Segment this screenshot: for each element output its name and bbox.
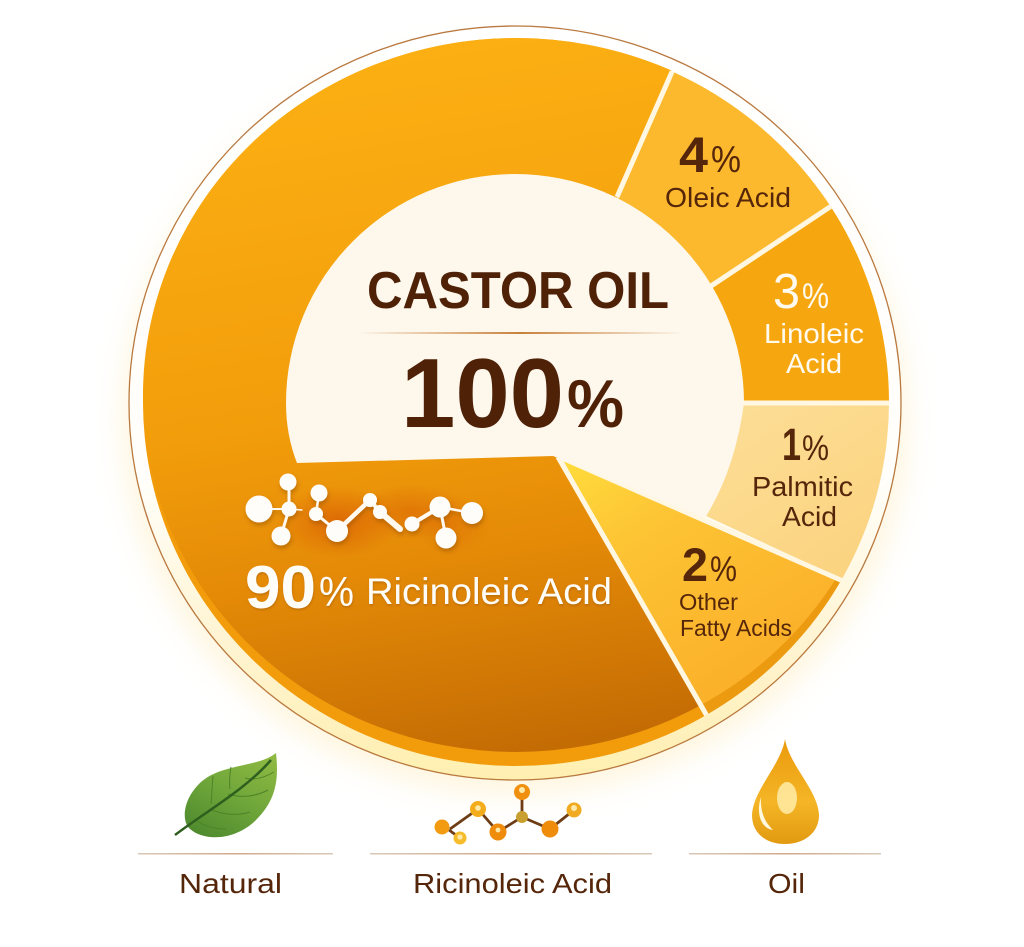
label: 2% other fatty acids — [679, 538, 792, 641]
label: 4% oleic acid: Oleic Acid — [665, 182, 791, 213]
icon: green leaf — [175, 753, 277, 837]
column rule: natural — [138, 853, 333, 854]
caption: oil: Oil — [768, 868, 805, 899]
background glow under the chart — [123, 46, 907, 794]
label: 2% other fatty acids: Other — [679, 589, 738, 615]
label: 90% ricinoleic acid: Ricinoleic Acid — [366, 571, 612, 612]
label: 90% ricinoleic acid: 90 — [245, 554, 316, 621]
label: 3% linoleic acid: Linoleic — [764, 318, 864, 349]
total: 100%: 100 — [401, 338, 564, 448]
title divider — [358, 332, 684, 334]
total: 100%: % — [567, 366, 624, 442]
label: 3% linoleic acid: 3 — [773, 265, 800, 319]
icon: orange molecule — [434, 784, 582, 844]
slice: oleic acid 4% — [617, 71, 831, 284]
slice: linoleic acid 3% — [712, 206, 889, 401]
label: 3% linoleic acid: Acid — [786, 348, 842, 379]
label: 4% oleic acid — [665, 127, 791, 213]
label: 2% other fatty acids: 2 — [682, 538, 708, 591]
label: 1% palmitic acid: Acid — [782, 501, 837, 532]
label: 4% oleic acid: % — [711, 139, 741, 180]
column rule: oil — [689, 853, 881, 854]
icon: white molecule on main slice — [246, 474, 492, 558]
column rule: ricinoleic acid — [370, 853, 652, 854]
label: 90% ricinoleic acid — [245, 554, 612, 621]
label: 3% linoleic acid: % — [802, 277, 829, 316]
caption: natural: Natural — [179, 868, 282, 899]
label: 1% palmitic acid: 1 — [782, 419, 801, 470]
label: 1% palmitic acid: Palmitic — [752, 471, 853, 502]
infographic: castor oil composition — [114, 25, 916, 894]
label: 1% palmitic acid — [752, 419, 853, 532]
outer ring of the chart — [129, 26, 901, 780]
title: castor oil: CASTOR OIL — [367, 262, 669, 320]
slice: other fatty acids 2% — [564, 461, 842, 716]
label: 90% ricinoleic acid: % — [319, 568, 354, 615]
slice: ricinoleic acid 90% — [143, 38, 705, 766]
slice separators — [556, 70, 889, 716]
label: 2% other fatty acids: % — [710, 550, 737, 589]
centre panel — [286, 174, 744, 518]
label: 2% other fatty acids: Fatty Acids — [680, 615, 792, 641]
caption: ricinoleic acid: Ricinoleic Acid — [413, 868, 612, 899]
icon: oil drop — [752, 739, 819, 844]
slice: palmitic acid 1% — [706, 404, 889, 579]
donut chart slices — [143, 20, 950, 766]
label: 1% palmitic acid: % — [802, 429, 829, 468]
label: 3% linoleic acid — [764, 265, 864, 379]
label: 4% oleic acid: 4 — [679, 127, 708, 183]
